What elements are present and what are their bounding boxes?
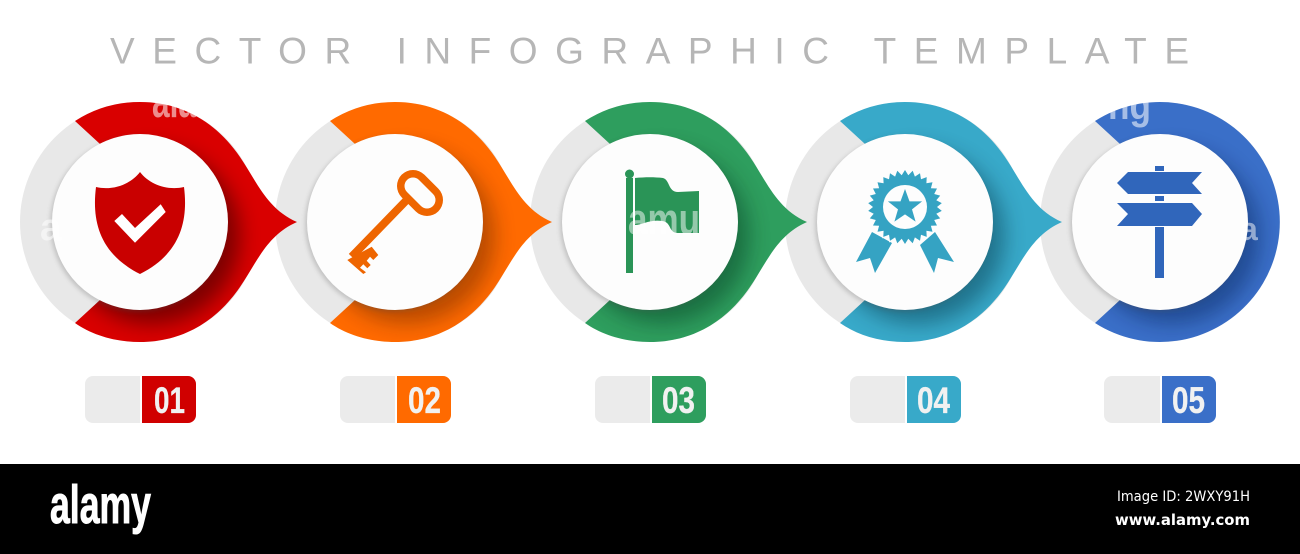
badge 05 xyxy=(1104,376,1216,423)
badge 05: 05 xyxy=(1172,380,1205,421)
icon: award rosette xyxy=(856,170,954,273)
icon: key xyxy=(347,186,427,274)
panel: step 4 award xyxy=(785,102,1062,342)
badge 01 xyxy=(85,376,196,423)
footer bar xyxy=(0,464,1300,554)
badge 02: 02 xyxy=(408,380,441,421)
badge 04: 04 xyxy=(917,380,950,421)
website: www.alamy.com xyxy=(1115,511,1250,529)
watermark fragments xyxy=(41,102,1258,240)
title: VECTOR INFOGRAPHIC TEMPLATE xyxy=(110,30,1189,72)
watermark fragments: a xyxy=(40,207,62,249)
watermark fragments: ng xyxy=(1108,84,1151,128)
badge 02 xyxy=(340,376,451,423)
panel: step 2 key xyxy=(275,102,552,342)
badge 03: 03 xyxy=(662,380,695,421)
watermark fragments: amu xyxy=(628,195,700,244)
badge 01: 01 xyxy=(154,380,185,421)
icon: shield with check xyxy=(95,172,185,274)
badge 03 xyxy=(595,376,706,423)
footer logo: alamy xyxy=(50,475,151,535)
watermark fragments: a xyxy=(1240,211,1258,247)
icon: flag xyxy=(625,170,699,273)
panel: step 1 shield xyxy=(20,102,297,342)
panel: step 3 flag xyxy=(530,102,807,342)
badge 04 xyxy=(850,376,961,423)
watermark fragments: ala xyxy=(152,75,196,127)
panel: step 5 signpost xyxy=(1040,102,1280,342)
icon: signpost xyxy=(1117,166,1202,278)
image id: Image ID: 2WXY91H xyxy=(1117,489,1250,505)
